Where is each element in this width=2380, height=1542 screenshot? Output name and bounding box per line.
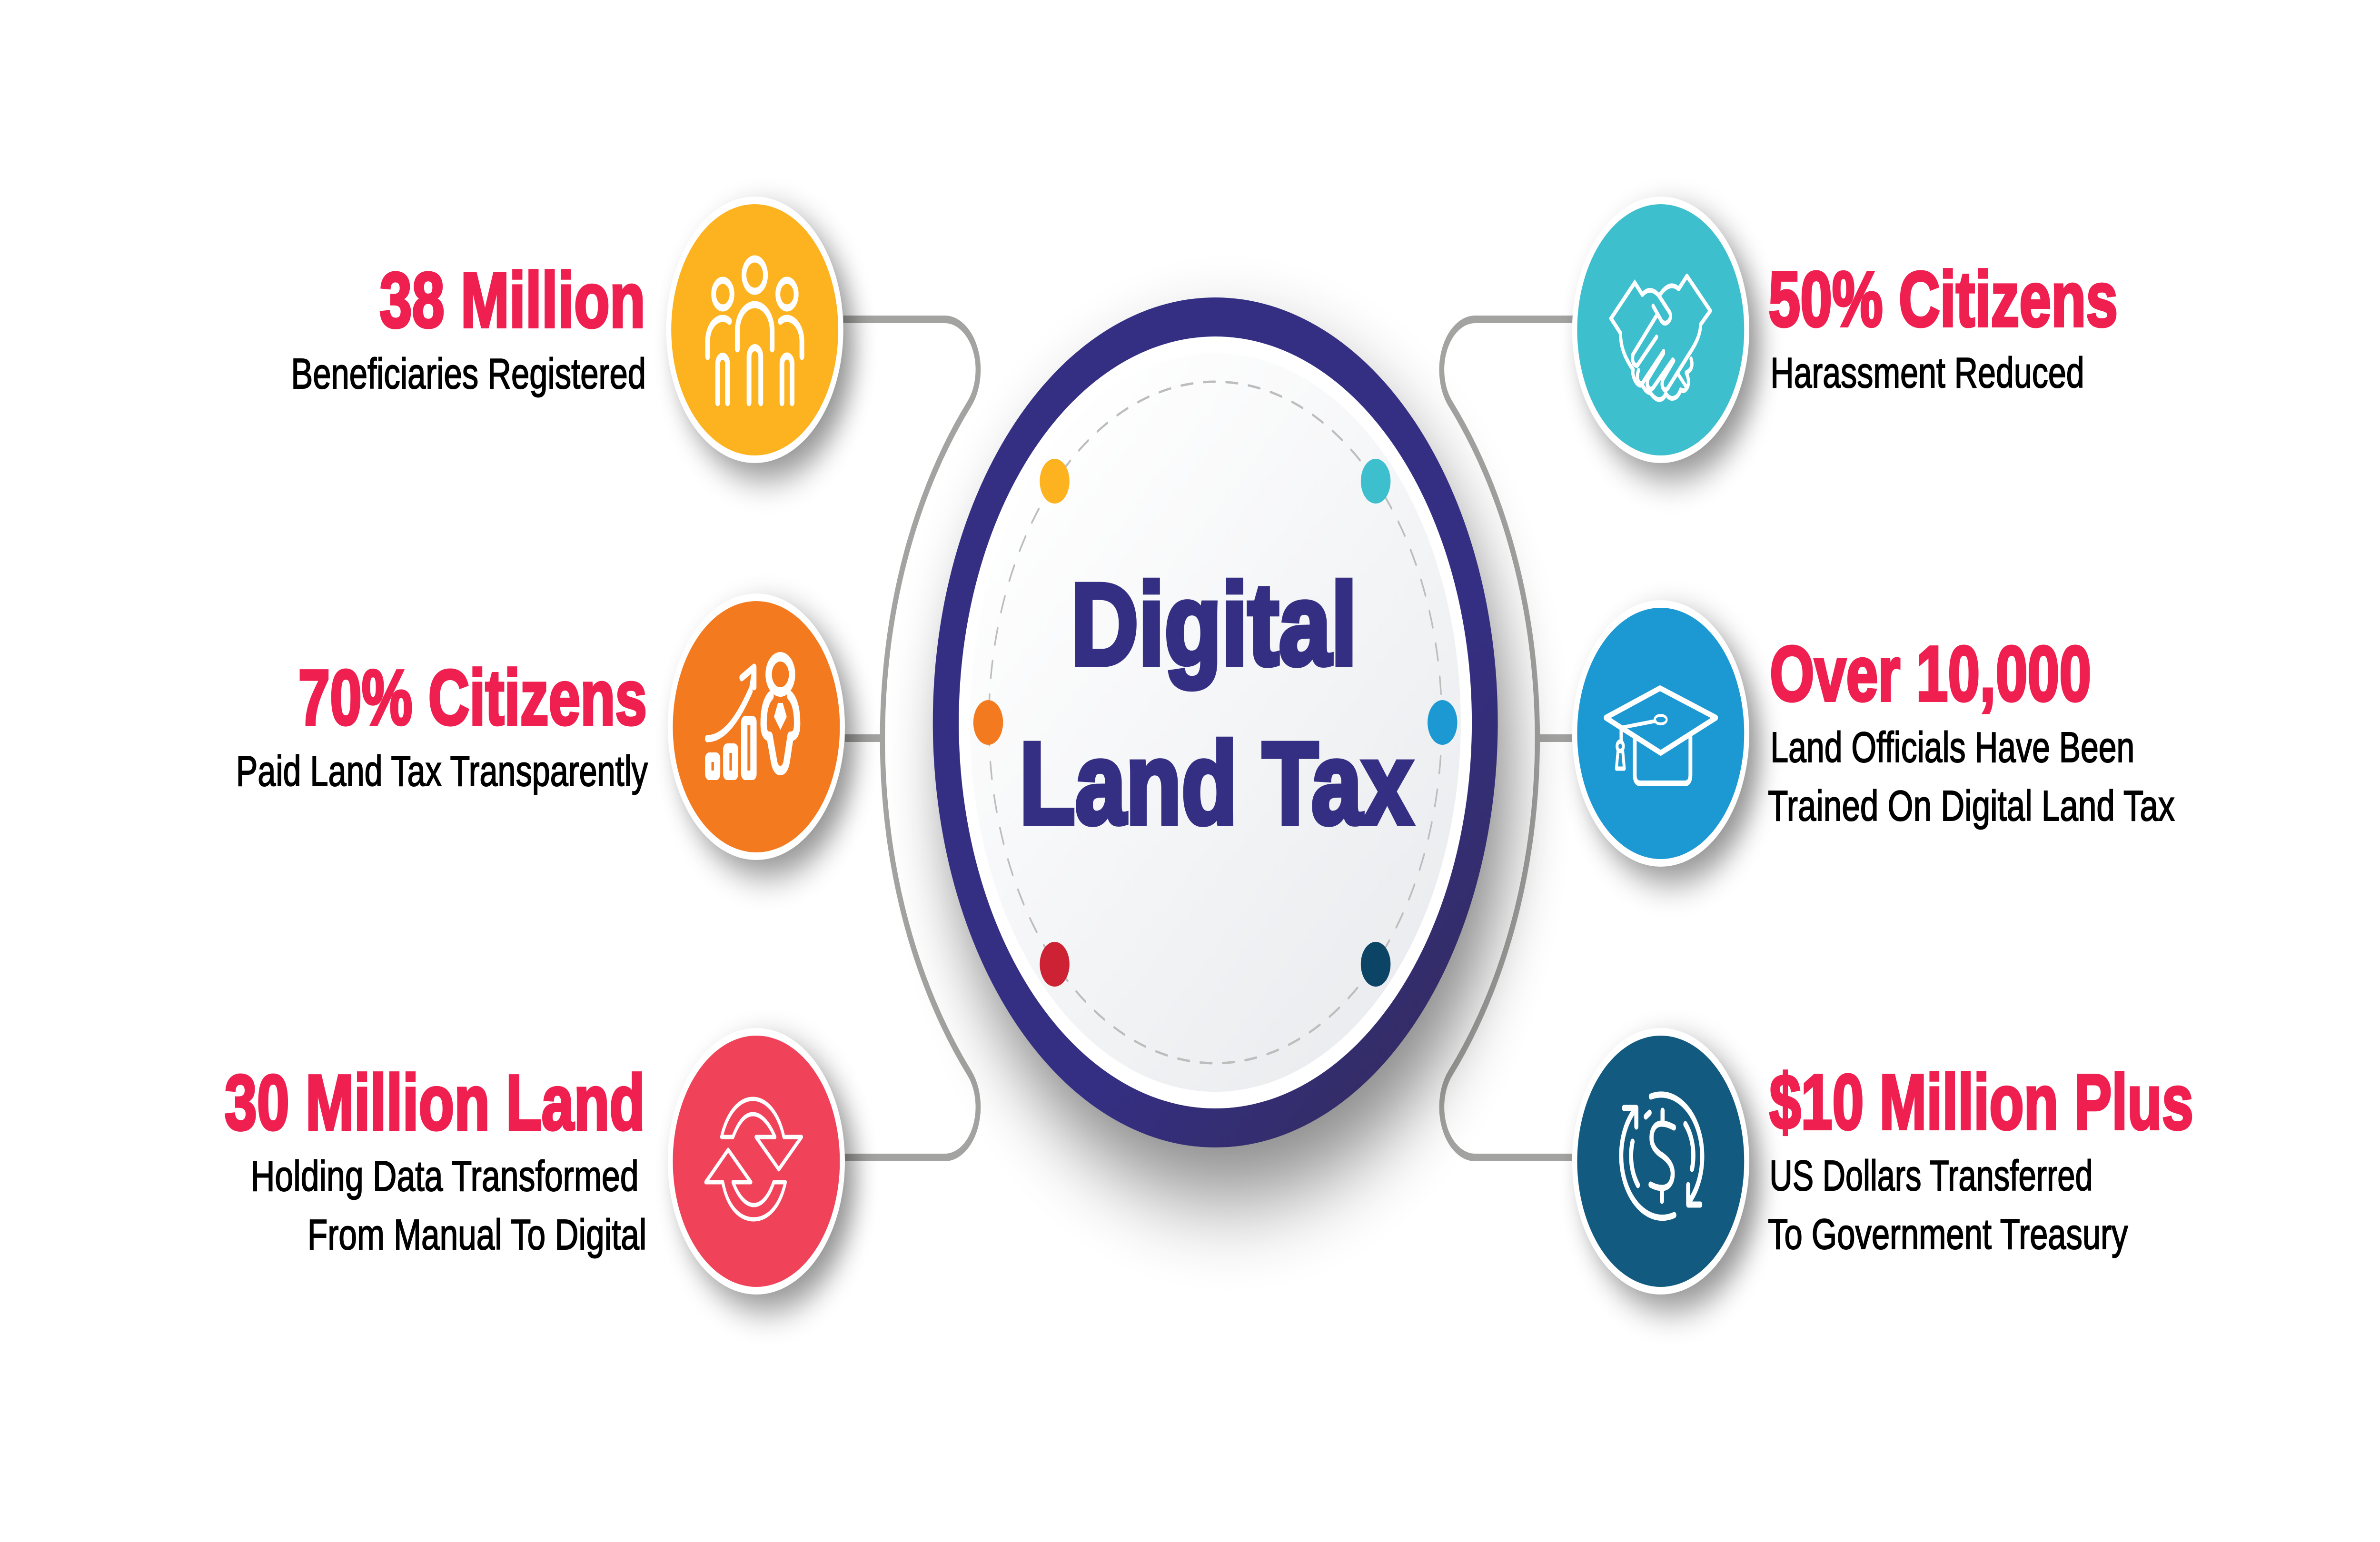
hub dot: yellow (1040, 459, 1070, 504)
hub dot: navy (1361, 942, 1390, 987)
title: Digital (1071, 559, 1357, 689)
stat: Over 10,000 (1768, 630, 2175, 830)
badge: growth (668, 593, 856, 876)
icon: sync arrows (706, 1099, 802, 1219)
hub dot: orange (973, 700, 1003, 745)
badge: dollar cycle (1572, 1028, 1760, 1310)
hub dot: red (1040, 942, 1070, 987)
stat: 70% Citizens: 70% Citizens (298, 654, 647, 741)
icon: handshake (1611, 276, 1710, 400)
stat: 30 Million Land: From Manual To Digital (307, 1211, 646, 1259)
stat: Over 10,000: Trained On Digital Land Tax (1768, 782, 2175, 830)
icon: growth chart and person (707, 657, 797, 775)
stat: 50% Citizens (1768, 256, 2118, 397)
title (1020, 559, 1413, 848)
icon: graduation cap (1606, 688, 1716, 783)
stat: $10 Million Plus: To Government Treasury (1768, 1211, 2128, 1258)
stat: $10 Million Plus (1768, 1058, 2193, 1258)
stat: 70% Citizens: Paid Land Tax Transparently (236, 748, 648, 795)
stat: 30 Million Land (225, 1059, 646, 1259)
badge: people (666, 197, 854, 479)
stat: 50% Citizens: Harassment Reduced (1770, 349, 2084, 397)
central hub (933, 297, 1510, 1197)
stat: 30 Million Land: 30 Million Land (225, 1059, 645, 1146)
stat: $10 Million Plus: $10 Million Plus (1769, 1058, 2193, 1146)
stat: 38 Million: Beneficiaries Registered (291, 350, 646, 398)
stat: Over 10,000: Land Officials Have Been (1770, 724, 2134, 771)
stat: 30 Million Land: Holding Data Transformed (251, 1153, 639, 1200)
hub dot: teal (1361, 459, 1390, 504)
connector: left bracket (843, 319, 978, 1157)
badge: data sync (668, 1028, 856, 1310)
badge: graduation cap (1572, 600, 1760, 882)
hub dot: blue (1428, 700, 1458, 745)
icon: people group (708, 259, 802, 403)
stat: 70% Citizens (236, 654, 648, 795)
stat: 38 Million (291, 257, 646, 398)
stat: $10 Million Plus: US Dollars Transferred (1769, 1152, 2093, 1200)
stat: Over 10,000: Over 10,000 (1770, 630, 2091, 717)
connector: right bracket (1442, 319, 1573, 1157)
title: Land Tax (1020, 718, 1413, 848)
badge: handshake (1572, 197, 1760, 479)
icon: dollar with circular arrows (1621, 1095, 1702, 1218)
stat: 38 Million: 38 Million (379, 257, 645, 344)
stat: 50% Citizens: 50% Citizens (1768, 256, 2118, 343)
